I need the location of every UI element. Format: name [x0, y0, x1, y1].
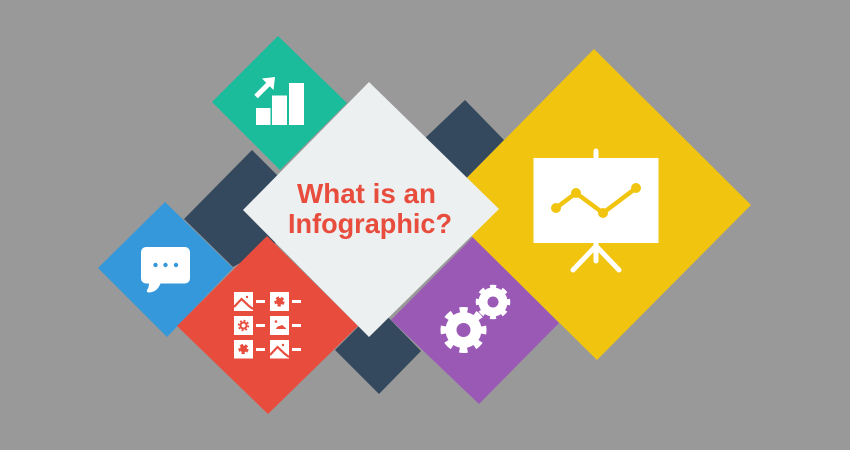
icon: large gear: [444, 310, 484, 350]
icon: image list: [234, 292, 301, 358]
tile: cloud middle right: [270, 316, 289, 335]
navy band: left: [184, 150, 320, 267]
tile: flower top right: [270, 292, 289, 311]
icon: speech bubble: [141, 247, 190, 292]
title: What is an: [297, 178, 436, 209]
icon: presentation board: [534, 151, 658, 270]
panel: central diamond: [243, 82, 499, 337]
icon: small gear: [478, 287, 508, 317]
panel: green diamond with growth chart: [212, 36, 347, 170]
title: [288, 178, 452, 239]
panel: purple diamond with gears: [391, 237, 559, 404]
tile: flower bottom left: [234, 340, 253, 358]
navy band: upper right: [400, 100, 504, 205]
panel: yellow diamond with presentation board: [440, 49, 751, 360]
list dashes: [256, 300, 301, 351]
tile: mountain bottom right: [270, 340, 289, 358]
title: Infographic?: [288, 208, 452, 239]
navy band: bottom: [335, 307, 421, 394]
tile: sun middle left: [234, 316, 253, 335]
tile: mountain top left: [234, 292, 253, 311]
icon: rising bar chart with arrow: [256, 77, 304, 125]
panel: blue diamond with speech bubble: [98, 202, 233, 337]
panel: red diamond with image list: [177, 236, 358, 414]
line chart on board: [551, 183, 641, 218]
